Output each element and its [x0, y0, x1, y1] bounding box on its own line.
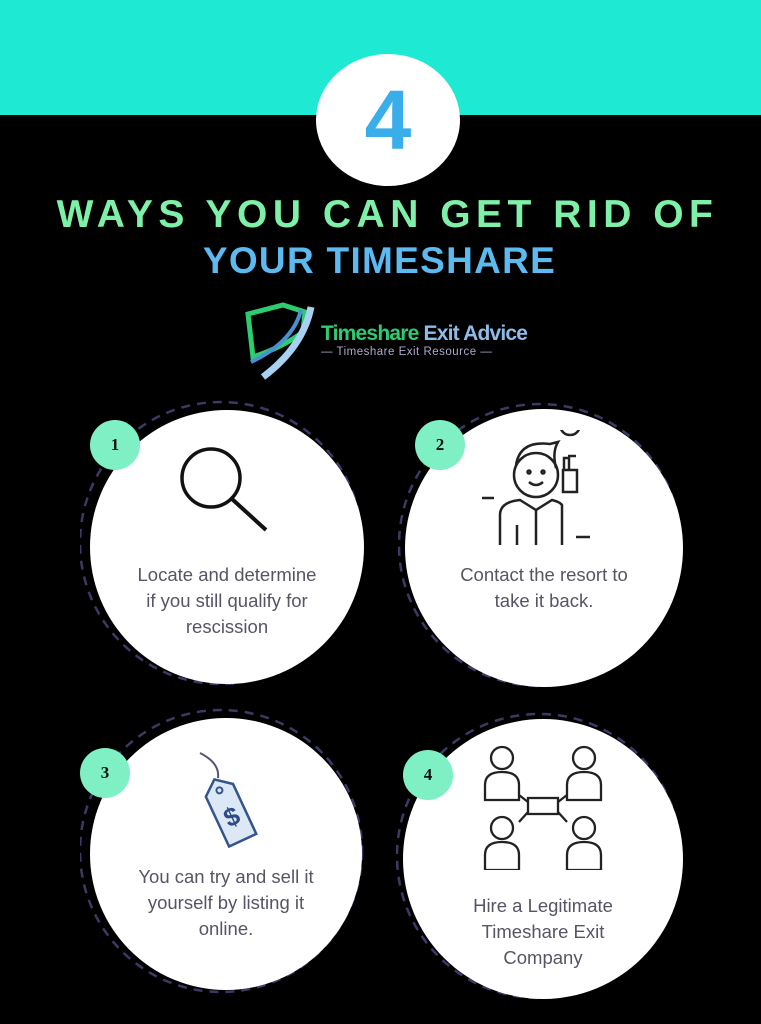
panel 4: [396, 712, 683, 1000]
badge 1: 1: [111, 435, 119, 454]
panel 1: [80, 400, 364, 686]
badge 3: [80, 748, 130, 798]
icon: shield: [245, 302, 314, 380]
badge 2: [415, 420, 465, 470]
icon: price tag: $: [219, 800, 245, 833]
panel 3: [80, 708, 364, 994]
icon: team network: [484, 746, 602, 870]
panel 4: Hire a Legitimate Timeshare Exit Company: [473, 895, 613, 968]
badge 4: [403, 750, 453, 800]
logo: Timeshare Exit Advice: [321, 322, 527, 345]
logo: [245, 302, 528, 380]
title: YOUR TIMESHARE: [203, 240, 556, 281]
badge 1: [90, 420, 140, 470]
logo: — Timeshare Exit Resource —: [321, 346, 492, 358]
number circle: 4: [365, 73, 411, 167]
title: [56, 193, 718, 281]
icon: magnifier: [180, 447, 268, 532]
icon: price tag: [200, 752, 258, 848]
panel 1: Locate and determine if you still qualify for rescission: [138, 564, 316, 637]
panel 2: Contact the resort to take it back.: [460, 564, 628, 611]
badge 4: 4: [424, 765, 432, 784]
badge 2: 2: [436, 435, 444, 454]
panel 2: [398, 402, 683, 688]
badge 3: 3: [101, 763, 109, 782]
icon: man with lightbulb: [482, 430, 590, 545]
top teal band: [0, 0, 761, 115]
panel 3: You can try and sell it yourself by listing it online.: [138, 866, 314, 939]
title: WAYS YOU CAN GET RID OF: [57, 193, 718, 236]
number circle: [316, 54, 460, 186]
